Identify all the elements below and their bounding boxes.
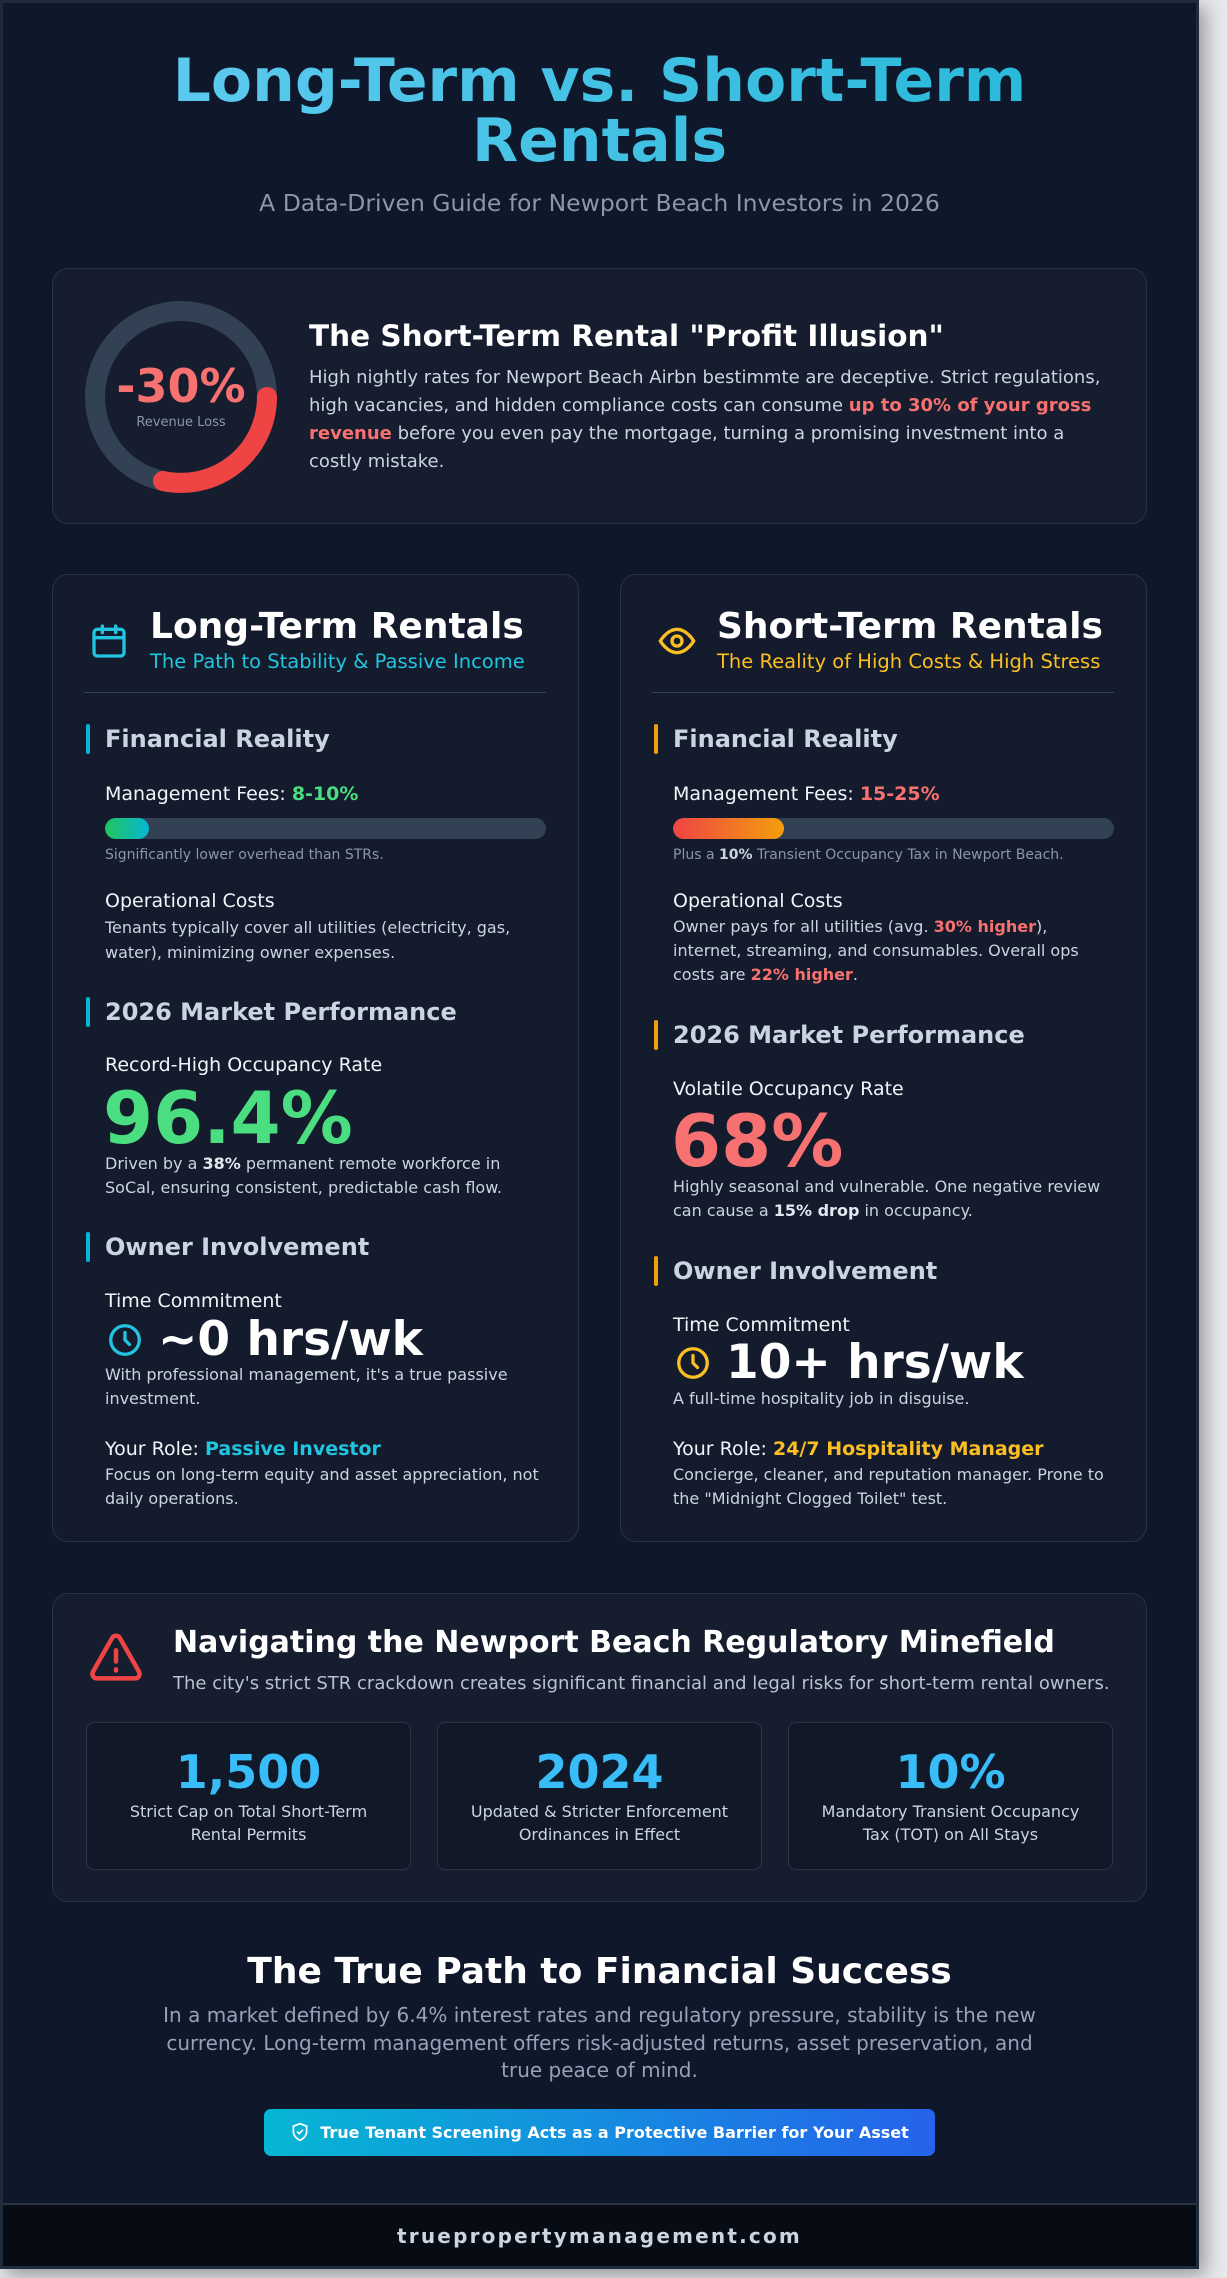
stat: 2024	[437, 1722, 762, 1870]
stat: 2024: Updated & Stricter Enforcement	[471, 1802, 728, 1821]
section: financial reality: Financial Reality	[105, 725, 330, 753]
footer: truepropertymanagement.com	[397, 2224, 802, 2248]
STR column content: Owner pays for all utilities (avg. 30% higher),	[673, 917, 1047, 936]
title: Long-Term vs. Short-Term	[173, 46, 1026, 116]
stat: 2024: Ordinances in Effect	[519, 1825, 680, 1844]
LTR column content: Tenants typically cover all utilities (electricity, gas,	[105, 918, 510, 937]
panel: profit illusion	[52, 268, 1147, 524]
stat: 10%	[788, 1722, 1113, 1870]
stat: 1,500	[86, 1722, 411, 1870]
stat: 68%: 68%	[671, 1099, 843, 1183]
LTR column content: Time Commitment	[105, 1290, 282, 1312]
donut chart: -30% revenue loss	[85, 301, 277, 493]
donut chart: -30% revenue loss: -30%	[116, 359, 246, 413]
paragraph: high vacancies, and hidden compliance costs can consume up to 30% of your gross	[309, 395, 1091, 416]
title	[0, 51, 1199, 171]
section: market performance: 2026 Market Performance	[105, 998, 457, 1026]
conclusion text: In a market defined by 6.4% interest rates and regulatory pressure, stability is the new	[163, 2003, 1036, 2027]
STR column content: costs are 22% higher.	[673, 965, 858, 984]
LTR column content: investment.	[105, 1389, 200, 1408]
stat: 10%: 10%	[895, 1745, 1006, 1799]
paragraph: High nightly rates for Newport Beach Airbn bestimmte are deceptive. Strict regulations,	[309, 367, 1100, 388]
STR column content: 10+ hrs/wk	[726, 1335, 1024, 1390]
donut chart: -30% revenue loss: Revenue Loss	[136, 415, 226, 430]
LTR column content: Focus on long-term equity and asset appreciation, not	[105, 1465, 539, 1484]
subtitle: A Data-Driven Guide for Newport Beach Investors in 2026	[259, 189, 940, 217]
icon: eye	[658, 628, 696, 654]
panel: long-term rentals	[52, 574, 579, 1542]
LTR column content: Record-High Occupancy Rate	[105, 1054, 382, 1076]
STR column content: Management Fees: 15-25%	[673, 783, 940, 805]
STR column content: Your Role: 24/7 Hospitality Manager	[673, 1438, 1044, 1460]
section: owner involvement: Owner Involvement	[105, 1233, 369, 1261]
heading: The Short-Term Rental "Profit Illusion"	[309, 319, 944, 353]
paragraph: costly mistake.	[309, 451, 444, 472]
button: tenant screening	[264, 2109, 935, 2156]
paragraph: revenue before you even pay the mortgage, turning a promising investment into a	[309, 423, 1064, 444]
LTR column content: Driven by a 38% permanent remote workforce in	[105, 1154, 500, 1173]
stat: 10%: Tax (TOT) on All Stays	[863, 1825, 1038, 1844]
section: owner involvement: Owner Involvement	[673, 1257, 937, 1285]
STR column content	[652, 606, 1114, 1508]
section: financial reality: Financial Reality	[673, 725, 898, 753]
LTR column content	[84, 606, 546, 1508]
LTR column content: Management Fees: 8-10%	[105, 783, 358, 805]
LTR column content: daily operations.	[105, 1489, 239, 1508]
title: Rentals	[472, 106, 727, 176]
stat: 1,500: Rental Permits	[191, 1825, 306, 1844]
stat: 96.4%: 96.4%	[103, 1076, 353, 1160]
STR column content: Time Commitment	[673, 1314, 850, 1336]
LTR column content: water), minimizing owner expenses.	[105, 943, 395, 962]
STR column content: Plus a 10% Transient Occupancy Tax in Newport Beach.	[673, 847, 1064, 863]
STR column content: Operational Costs	[673, 890, 843, 912]
conclusion text: true peace of mind.	[501, 2058, 698, 2082]
section: market performance: 2026 Market Performance	[673, 1021, 1025, 1049]
STR column content: Highly seasonal and vulnerable. One negative review	[673, 1177, 1100, 1196]
STR column content: Volatile Occupancy Rate	[673, 1078, 904, 1100]
icon: clock	[109, 1324, 141, 1356]
LTR column content: The Path to Stability & Passive Income	[150, 650, 525, 673]
panel: regulatory minefield	[52, 1593, 1147, 1902]
LTR column content: Operational Costs	[105, 890, 275, 912]
conclusion text: currency. Long-term management offers risk-adjusted returns, asset preservation, and	[166, 2030, 1033, 2054]
STR column content: internet, streaming, and consumables. Overall ops	[673, 941, 1079, 960]
conclusion heading: The True Path to Financial Success	[247, 1951, 952, 1992]
button: tenant screening: True Tenant Screening Acts as a Protective Barrier for Your Asset	[320, 2123, 909, 2142]
progress bar	[105, 818, 546, 839]
LTR column content: Significantly lower overhead than STRs.	[105, 847, 384, 863]
LTR column content: Your Role: Passive Investor	[105, 1438, 381, 1460]
STR column content: Concierge, cleaner, and reputation manager. Prone to	[673, 1465, 1104, 1484]
icon: clock	[677, 1347, 709, 1379]
LTR column content: With professional management, it's a true passive	[105, 1365, 508, 1384]
STR column content: The Reality of High Costs & High Stress	[717, 650, 1100, 673]
icon: calendar	[92, 624, 126, 658]
stat: 2024: 2024	[535, 1745, 664, 1799]
STR column content: A full-time hospitality job in disguise.	[673, 1389, 969, 1408]
heading: LTR: Long-Term Rentals	[150, 606, 524, 647]
panel: short-term rentals	[620, 574, 1147, 1542]
stat: 1,500: Strict Cap on Total Short-Term	[130, 1802, 367, 1821]
paragraph	[309, 367, 1100, 472]
footer	[3, 2203, 1196, 2266]
LTR column content: SoCal, ensuring consistent, predictable cash flow.	[105, 1178, 502, 1197]
text: The city's strict STR crackdown creates significant financial and legal risks for short-term rental owners.	[173, 1673, 1110, 1694]
icon: warning	[90, 1634, 142, 1681]
LTR column content: ~0 hrs/wk	[158, 1312, 423, 1367]
conclusion text	[163, 2003, 1036, 2082]
STR column content: can cause a 15% drop in occupancy.	[673, 1201, 973, 1220]
stat: 1,500: 1,500	[176, 1745, 321, 1799]
stat: 10%: Mandatory Transient Occupancy	[822, 1802, 1079, 1821]
heading: STR: Short-Term Rentals	[717, 606, 1103, 647]
STR column content: the "Midnight Clogged Toilet" test.	[673, 1489, 947, 1508]
heading: regulatory: Navigating the Newport Beach Regulatory Minefield	[173, 1625, 1055, 1660]
progress bar	[673, 818, 1114, 839]
